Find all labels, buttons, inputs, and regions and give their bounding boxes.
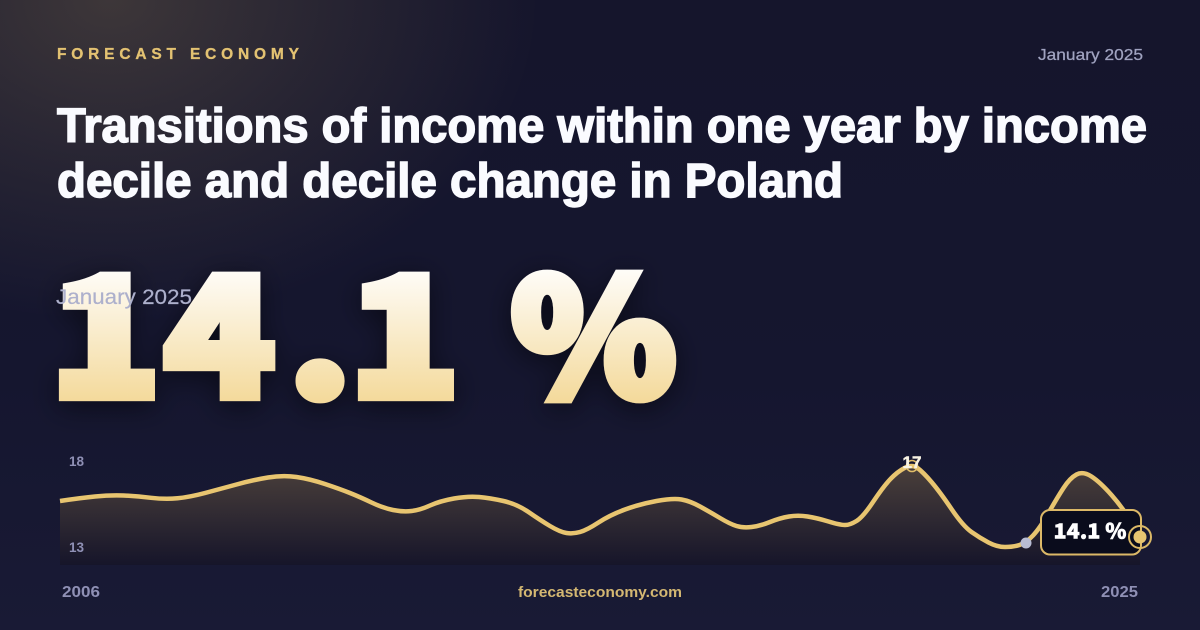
title <box>57 100 1147 208</box>
current value callout <box>1041 510 1141 554</box>
peak marker 17: 17 <box>903 453 921 472</box>
current value callout: 14.1 % <box>1054 516 1127 546</box>
chart area fill <box>60 466 1140 565</box>
x axis start year: 2006 <box>62 584 100 601</box>
y axis label 13: 13 <box>69 540 85 555</box>
previous point marker <box>1020 538 1032 548</box>
x axis end year: 2025 <box>1101 584 1138 601</box>
title: decile and decile change in Poland <box>57 155 843 208</box>
big value: % <box>511 210 676 444</box>
date, top right: January 2025 <box>1038 47 1143 64</box>
area chart <box>60 453 1151 565</box>
current point marker <box>1129 526 1151 548</box>
date overlapping big value: January 2025 <box>56 286 192 309</box>
chart line <box>60 466 1140 547</box>
brand eyebrow: FORECAST ECONOMY <box>57 46 300 63</box>
source website: forecasteconomy.com <box>518 584 682 601</box>
y axis label 18: 18 <box>69 454 85 469</box>
big value <box>50 210 676 444</box>
title: Transitions of income within one year by income <box>57 100 1147 153</box>
big value: 14.1 <box>50 210 460 443</box>
